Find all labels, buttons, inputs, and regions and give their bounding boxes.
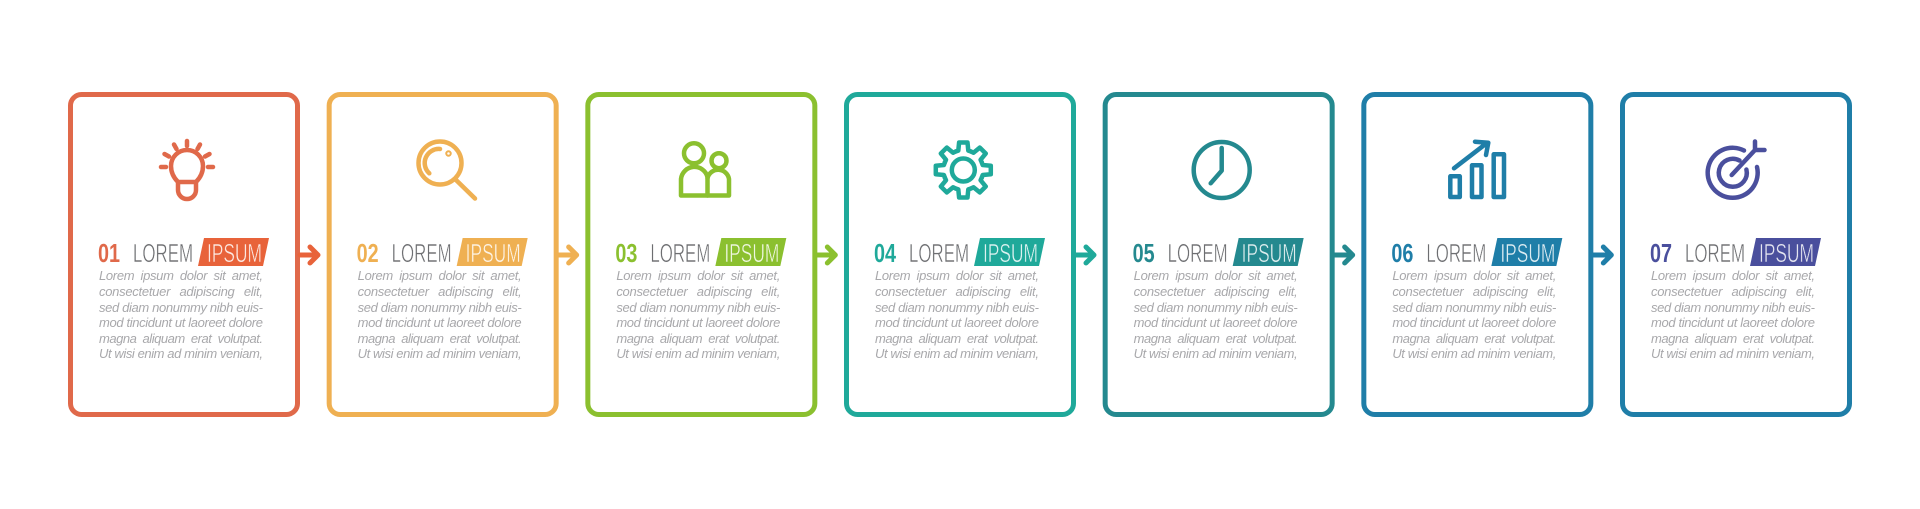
body text 07: sed diam nonummy nibh euis- [1651,300,1816,315]
body text 07: Lorem ipsum dolor sit amet, [1651,268,1815,283]
body text 07: mod tincidunt ut laoreet dolore [1651,315,1815,330]
body text 06: sed diam nonummy nibh euis- [1392,300,1557,315]
heading word LOREM: LOREM [909,238,969,268]
arrow 01 to 02 [300,247,318,263]
body text 07 [1651,268,1816,361]
body text 02: sed diam nonummy nibh euis- [358,300,522,315]
heading tag IPSUM [1750,238,1821,268]
step number 02: 02 [357,238,379,268]
body text 01: magna aliquam erat volutpat. [99,331,263,346]
heading tag IPSUM: IPSUM [724,238,779,268]
panel: step 03 [588,94,815,414]
body text 03: mod tincidunt ut laoreet dolore [616,315,780,330]
heading word LOREM: LOREM [1685,238,1745,268]
body text 05 [1134,268,1298,361]
card frame 01 [70,94,298,414]
body text 02: magna aliquam erat volutpat. [358,331,522,346]
heading word LOREM: LOREM [650,238,710,268]
heading tag IPSUM: IPSUM [207,238,262,268]
body text 03 [616,268,781,361]
body text 02: Ut wisi enim ad minim veniam, [358,346,522,361]
body text 02: consectetuer adipiscing elit, [358,284,522,299]
card frame 04 [846,94,1074,414]
step number 07: 07 [1650,238,1672,268]
body text 01 [99,268,264,361]
heading word LOREM: LOREM [133,238,193,268]
card frame 03 [588,94,815,414]
body text 02 [358,268,522,361]
body text 04: consectetuer adipiscing elit, [875,284,1039,299]
body text 05: Ut wisi enim ad minim veniam, [1134,346,1298,361]
panel: step 01 [70,94,298,414]
arrow 05 to 06 [1335,247,1353,263]
body text 03: Lorem ipsum dolor sit amet, [616,268,780,283]
panel: step 07 [1622,94,1850,414]
icon: people [681,143,729,196]
card frame 06 [1364,94,1591,414]
heading tag IPSUM: IPSUM [1500,238,1555,268]
body text 06: mod tincidunt ut laoreet dolore [1392,315,1556,330]
body text 05: consectetuer adipiscing elit, [1134,284,1298,299]
body text 05: magna aliquam erat volutpat. [1134,331,1298,346]
body text 02: mod tincidunt ut laoreet dolore [358,315,522,330]
step number 03: 03 [615,238,637,268]
heading word LOREM: LOREM [1168,238,1228,268]
heading tag IPSUM: IPSUM [983,238,1038,268]
heading tag IPSUM: IPSUM [1759,238,1814,268]
body text 04: Lorem ipsum dolor sit amet, [875,268,1039,283]
heading word LOREM: LOREM [392,238,452,268]
body text 05: mod tincidunt ut laoreet dolore [1134,315,1298,330]
body text 06 [1392,268,1557,361]
arrow 02 to 03 [559,247,577,263]
heading tag IPSUM: IPSUM [466,238,521,268]
heading tag IPSUM [198,238,269,268]
body text 03: magna aliquam erat volutpat. [616,331,780,346]
body text 04: magna aliquam erat volutpat. [875,331,1039,346]
body text 01: Lorem ipsum dolor sit amet, [99,268,263,283]
body text 03: sed diam nonummy nibh euis- [616,300,781,315]
body text 06: Lorem ipsum dolor sit amet, [1392,268,1556,283]
panel: step 02 [329,94,556,414]
body text 01: Ut wisi enim ad minim veniam, [99,346,263,361]
body text 04: sed diam nonummy nibh euis- [875,300,1040,315]
heading tag IPSUM [715,238,786,268]
icon: clock [1194,142,1250,198]
icon: gear [936,142,991,198]
arrow 03 to 04 [817,247,835,263]
heading tag IPSUM [1491,238,1562,268]
icon: bar chart with rising arrow [1450,142,1504,197]
heading tag IPSUM [457,238,528,268]
body text 05: sed diam nonummy nibh euis- [1134,300,1298,315]
card frame 02 [329,94,556,414]
body text 02: Lorem ipsum dolor sit amet, [358,268,522,283]
icon: target with dart [1708,142,1764,198]
step number 05: 05 [1133,238,1155,268]
step number 01: 01 [98,238,120,268]
body text 06: Ut wisi enim ad minim veniam, [1392,346,1556,361]
heading word LOREM: LOREM [1426,238,1486,268]
icon: magnifier [418,142,475,198]
body text 04: Ut wisi enim ad minim veniam, [875,346,1039,361]
arrow 04 to 05 [1076,247,1094,263]
body text 01: mod tincidunt ut laoreet dolore [99,315,263,330]
body text 03: consectetuer adipiscing elit, [616,284,780,299]
card frame 05 [1105,94,1332,414]
icon: light bulb [161,141,213,199]
body text 01: consectetuer adipiscing elit, [99,284,263,299]
body text 04: mod tincidunt ut laoreet dolore [875,315,1039,330]
body text 05: Lorem ipsum dolor sit amet, [1134,268,1298,283]
step number 06: 06 [1391,238,1413,268]
body text 07: Ut wisi enim ad minim veniam, [1651,346,1815,361]
card frame 07 [1622,94,1850,414]
body text 06: consectetuer adipiscing elit, [1392,284,1556,299]
arrow 06 to 07 [1593,247,1611,263]
panel: step 05 [1105,94,1332,414]
body text 07: magna aliquam erat volutpat. [1651,331,1815,346]
panel: step 04 [846,94,1074,414]
body text 07: consectetuer adipiscing elit, [1651,284,1815,299]
heading tag IPSUM: IPSUM [1242,238,1297,268]
body text 04 [875,268,1040,361]
body text 06: magna aliquam erat volutpat. [1392,331,1556,346]
body text 01: sed diam nonummy nibh euis- [99,300,264,315]
panel: step 06 [1364,94,1591,414]
body text 03: Ut wisi enim ad minim veniam, [616,346,780,361]
heading tag IPSUM [1233,238,1304,268]
step number 04: 04 [874,238,896,268]
heading tag IPSUM [974,238,1045,268]
